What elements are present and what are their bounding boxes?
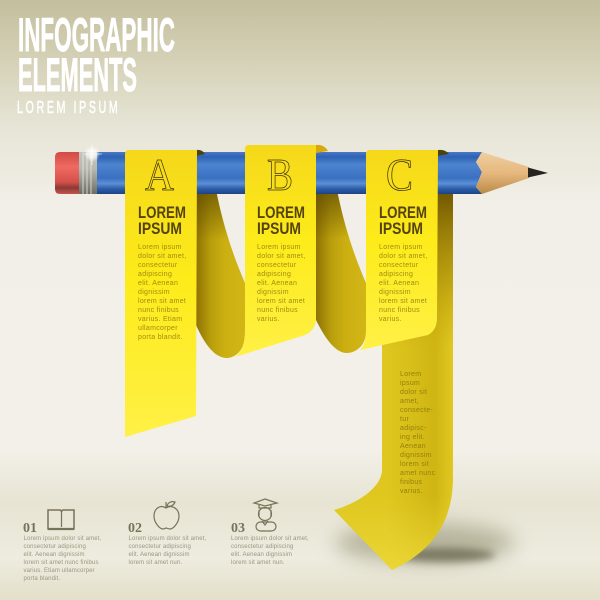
text B: varius. [257, 316, 280, 323]
text A: consectetur [138, 262, 178, 269]
pencil [55, 145, 548, 194]
text 2: lorem sit amet nun. [128, 560, 182, 566]
text 2: consectetur adipiscing [128, 544, 191, 550]
text A: Lorem ipsum [138, 244, 182, 251]
text C: Lorem ipsum [379, 244, 423, 251]
tail text: varius. [400, 488, 423, 495]
text 1: Lorem ipsum dolor sit amet, [24, 536, 102, 542]
text B: adipiscing [257, 271, 291, 278]
sparkle [84, 145, 102, 165]
text 1: lorem sit amet nunc finibus [24, 560, 99, 566]
text C: dignissim [379, 289, 411, 296]
text C: nunc finibus [379, 307, 420, 314]
metal ferrule [79, 152, 97, 194]
text A: lorem sit amet [138, 298, 186, 305]
icon: graduate [254, 499, 277, 531]
text 1: elit. Aenean dignissim [24, 552, 85, 558]
text A: dolor sit amet, [138, 253, 186, 260]
text 1: varius. Etiam ullamcorper [24, 568, 95, 574]
ribbon C long tail [334, 190, 453, 570]
tail text: Aenean [400, 443, 426, 450]
text A: adipiscing [138, 271, 172, 278]
heading A: IPSUM [138, 219, 182, 238]
ribbon A back fold [196, 190, 245, 358]
text B: dolor sit amet, [257, 253, 305, 260]
text 3: elit. Aenean dignissim [231, 552, 292, 558]
text B: nunc finibus [257, 307, 298, 314]
text: INFOGRAPHIC [18, 8, 175, 61]
icon: apple [154, 502, 179, 529]
letter B: B [267, 150, 293, 200]
text 1: consectetur adipiscing [24, 544, 86, 550]
text B: Lorem ipsum [257, 244, 301, 251]
tail text: amet nunc [400, 470, 436, 477]
icon: book [48, 510, 74, 529]
tail text: consecte- [400, 407, 433, 414]
tail text: dignissim [400, 452, 432, 459]
text B: elit. Aenean [257, 280, 297, 287]
text 1: porta blandit. [24, 576, 60, 582]
tail text: lorem sit [400, 461, 429, 468]
letter A: A [145, 150, 174, 200]
text A: nunc finibus [138, 307, 179, 314]
subtitle: LOREM IPSUM [17, 98, 118, 118]
text C: dolor sit amet, [379, 253, 427, 260]
heading B: LOREM [257, 203, 305, 222]
text A: dignissim [138, 289, 170, 296]
tail text: ing elit. [400, 434, 425, 441]
tail text: finibus [400, 479, 423, 486]
title: ELEMENTS [18, 48, 137, 101]
text B: lorem sit amet [257, 298, 305, 305]
text C: adipiscing [379, 271, 413, 278]
text C: varius. [379, 316, 402, 323]
heading A: LOREM [138, 203, 186, 222]
tail text: amet, [400, 398, 419, 405]
ground shadow [335, 523, 515, 563]
tail text: adipisc- [400, 425, 427, 432]
graphite lead [528, 168, 548, 178]
ribbon C front [360, 150, 449, 350]
text C: consectetur [379, 262, 419, 269]
text A: porta blandit. [138, 334, 183, 341]
text 2: Lorem ipsum dolor sit amet, [128, 536, 207, 542]
text B: dignissim [257, 289, 289, 296]
text 3: consectetur adipiscing [231, 544, 293, 550]
tail text: dolor sit [400, 389, 427, 396]
title [18, 8, 175, 101]
text B: consectetur [257, 262, 297, 269]
footer item 3 [231, 499, 309, 566]
letter C: C [386, 150, 413, 200]
tail text: ipsum [400, 380, 420, 387]
tail text: tur [400, 416, 409, 423]
heading B [257, 203, 305, 238]
footer item 2 [128, 502, 207, 566]
number 02: 02 [128, 521, 142, 536]
text A: varius. Etiam [138, 316, 182, 323]
number 03: 03 [231, 521, 245, 536]
number 01: 01 [23, 521, 37, 536]
text 3: lorem sit amet nun. [231, 560, 285, 566]
heading C: IPSUM [379, 219, 423, 238]
text A: elit. Aenean [138, 280, 178, 287]
text 3: Lorem ipsum dolor sit amet, [231, 536, 309, 542]
footer item 1 [23, 510, 102, 582]
heading C: LOREM [379, 203, 427, 222]
heading C [379, 203, 427, 238]
heading B: IPSUM [257, 219, 301, 238]
text 2: elit. Aenean dignissim [128, 552, 190, 558]
ribbon B front [235, 145, 328, 357]
tail text: Lorem [400, 371, 421, 378]
heading A [138, 203, 186, 238]
text C: lorem sit amet [379, 298, 427, 305]
text C: elit. Aenean [379, 280, 419, 287]
text A: ullamcorper [138, 325, 178, 332]
pencil body [97, 152, 482, 194]
ribbon A front [125, 150, 205, 437]
ribbon B back fold [316, 190, 366, 353]
eraser [55, 152, 79, 194]
wood tip [476, 152, 529, 194]
